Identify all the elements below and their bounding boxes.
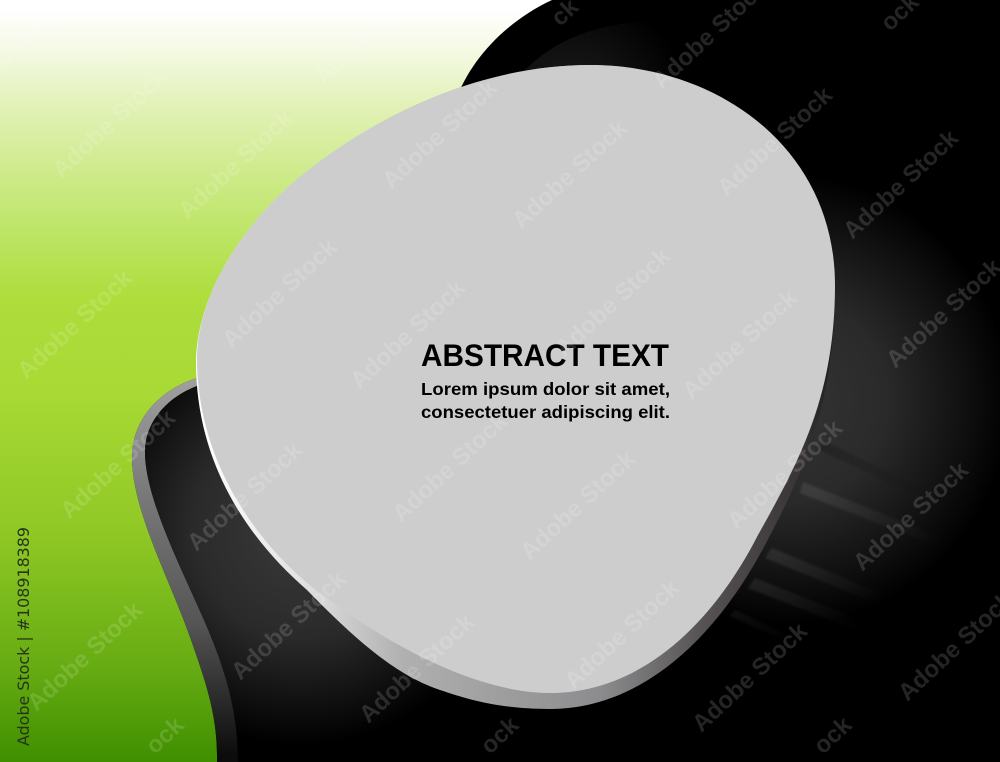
stock watermarks: Adobe Stock bbox=[182, 436, 308, 556]
stock watermarks: Adobe Stock bbox=[217, 233, 343, 353]
green gradient panel bbox=[0, 0, 600, 762]
stock watermarks: Adobe Stock bbox=[677, 284, 803, 404]
stock watermarks: Adobe Stock bbox=[377, 74, 503, 194]
stock watermarks: Adobe Stock bbox=[550, 242, 676, 362]
body text: consectetuer adipiscing elit. bbox=[421, 402, 670, 422]
stock watermarks: Adobe Stock bbox=[848, 456, 974, 576]
heading: ABSTRACT TEXT bbox=[421, 337, 669, 373]
stock watermarks: ock bbox=[809, 711, 858, 759]
stock watermarks: Adobe Stock bbox=[47, 63, 173, 183]
stock watermarks: Adobe Stock bbox=[345, 274, 471, 394]
grey central blob bbox=[197, 65, 835, 693]
stock watermarks: Adobe Stock bbox=[55, 404, 181, 524]
stock watermarks: Adobe Stock bbox=[12, 264, 138, 384]
stock watermarks: Adobe Stock bbox=[354, 608, 480, 728]
dark glow on right bbox=[560, 175, 1000, 625]
lower left dark panel with grey rim bbox=[132, 378, 520, 762]
stock watermarks: Adobe Stock bbox=[515, 445, 641, 565]
stock watermarks: Adobe Stock bbox=[687, 617, 813, 737]
stock watermarks: ock bbox=[476, 711, 525, 759]
stock watermarks: Adobe Stock bbox=[387, 407, 513, 527]
stock watermarks: Adobe Stock bbox=[722, 414, 848, 534]
stock watermarks: Adobe Stock bbox=[226, 565, 352, 685]
stock watermarks: Adobe Stock bbox=[173, 104, 299, 224]
body text bbox=[421, 379, 670, 422]
stock watermarks: Adobe Stock bbox=[507, 114, 633, 234]
stock watermarks: Adobe Stock bbox=[559, 574, 685, 694]
top inner arc bbox=[510, 22, 790, 140]
diagonal light streaks bbox=[730, 440, 948, 644]
stock watermarks: ock bbox=[141, 711, 190, 759]
blob bottom edge shadow bbox=[196, 65, 835, 709]
stock watermarks: Adobe Stock bbox=[712, 81, 838, 201]
body text: Lorem ipsum dolor sit amet, bbox=[421, 379, 670, 399]
stock watermarks: Adobe Stock bbox=[22, 596, 148, 716]
stock watermarks: Adobe Stock bbox=[838, 124, 964, 244]
stock image id label: Adobe Stock | #108918389 bbox=[14, 527, 33, 746]
